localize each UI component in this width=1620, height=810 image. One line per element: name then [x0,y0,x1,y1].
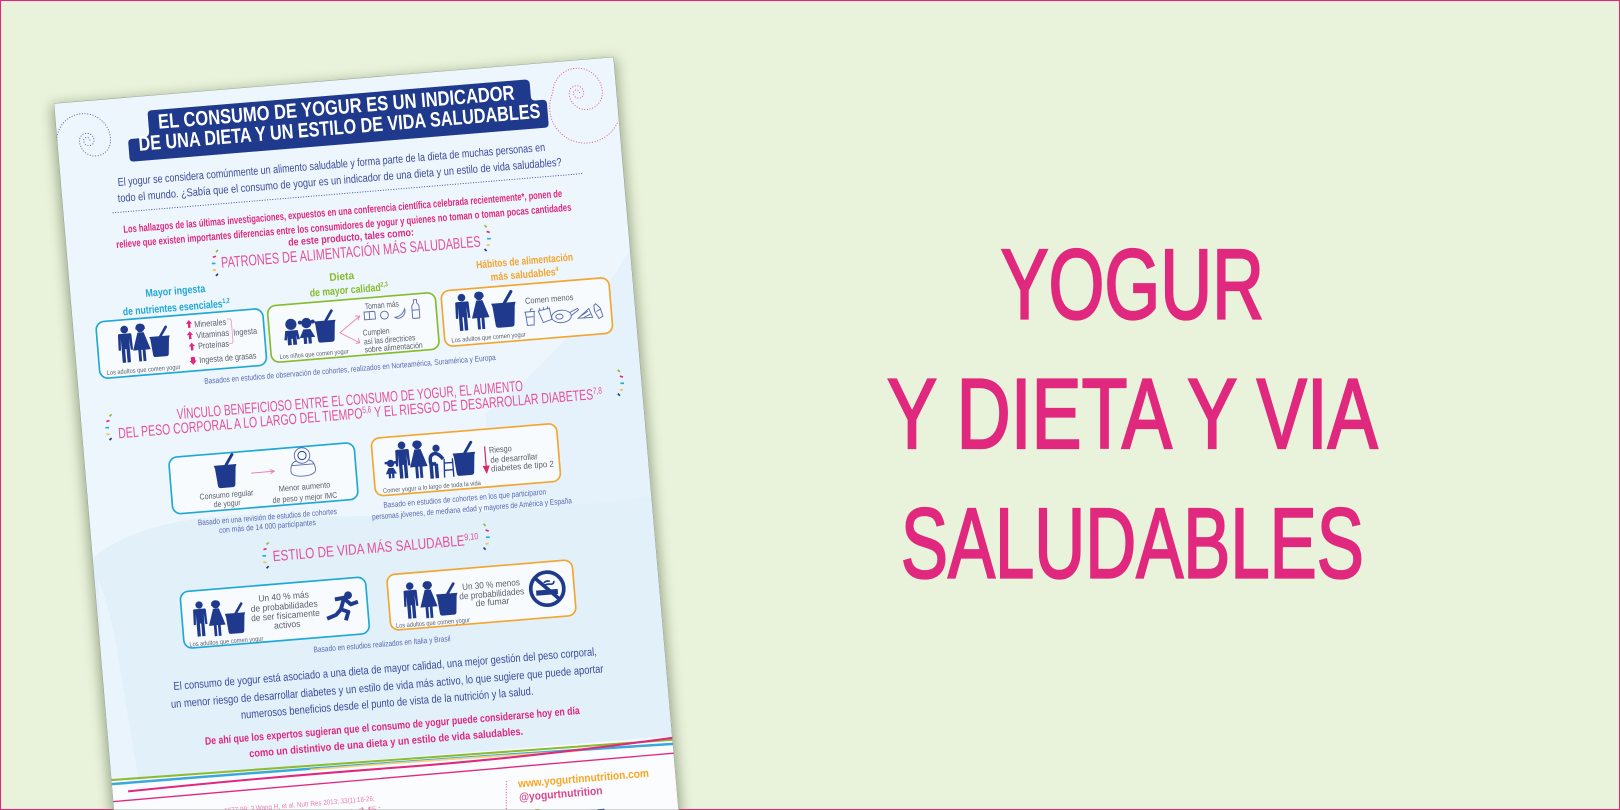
card: activos: Un 40 % más [258,589,310,604]
card: diabetes: Riesgo [489,443,512,455]
subheading: nutrientes: 1,2 [222,297,230,305]
caption: participantes: personas jóvenes, de mediana edad y mayores de América y España [372,496,573,522]
card: fumar [386,560,576,631]
card: peso: Consumo regular [199,488,254,502]
conclusion text: numerosos beneficios desde el punto de vista de la nutrición y la salud. [240,686,534,722]
card: diabetes [371,423,561,496]
highlighted research paragraph: Los hallazgos de las últimas investigaciones, expuestos en una conferencia científica celebrada recientemente*, ponen de [123,188,563,236]
card: dieta: así las directrices [363,333,416,346]
subheading: nutrientes: Mayor ingesta [145,283,207,300]
section heading: vinculo: Y EL RIESGO DE DESARROLLAR DIABETES [371,386,594,421]
spiral: left [57,114,111,156]
section heading: vinculo: VÍNCULO BENEFICIOSO ENTRE EL CONSUMO DE YOGUR, EL AUMENTO [176,378,524,423]
card: peso: de peso y mejor IMC [272,491,338,505]
card: nutrientes: Los adultos que comen yogur [107,364,181,377]
subheading: calidad: de mayor calidad [309,280,398,300]
conclusion highlight: como un distintivo de una dieta y un estilo de vida saludables. [249,726,524,760]
card: dieta: Toman más [365,299,399,311]
conclusion highlight: De ahí que los expertos sugieran que el consumo de yogur puede considerarse hoy en día [204,705,581,748]
section heading: estilo: ESTILO DE VIDA MÁS SALUDABLE [272,528,518,565]
title banner [126,78,549,162]
subheading: nutrientes: de nutrientes esenciales [122,296,249,318]
caption: revision: Basado en una revisión de estudios de cohortes [198,507,337,527]
conclusion text [170,646,604,722]
caption: italia: Basado en estudios realizados en Italia y Brasil [313,634,451,654]
poster [54,57,682,810]
card: habitos: Los adultos que comen yogur [451,331,527,345]
section heading: vinculo [105,370,624,442]
headline: YOGUR [1001,230,1264,341]
highlighted research paragraph: relieve que existen importantes diferencias entre los consumidores de yogur y quienes no toman o toman pocas cantidades [116,202,572,251]
section heading: estilo: 9,10 [464,531,479,542]
card: fumar: de fumar [475,596,510,608]
card: dieta: Cumplen [362,326,390,338]
card: activos: activos [274,619,301,631]
subheading: calidad: 2,3 [380,281,388,289]
card: peso [168,442,358,514]
highlighted research paragraph: de este producto, tales como: [288,227,414,249]
poster shadow [52,59,682,810]
card: diabetes: de desarrollar [490,451,538,465]
subheading: calidad [310,272,388,297]
caption: cohortes: Basados en estudios de observación de cohortes, realizados en Norteamérica, Suramérica y Europa [204,353,497,386]
card: nutrientes: Vitaminas [196,328,230,340]
headline: SALUDABLES [901,489,1364,600]
title banner: DE UNA DIETA Y UN ESTILO DE VIDA SALUDABLES [138,100,541,156]
headline [887,230,1378,600]
section heading: patrones: PATRONES DE ALIMENTACIÓN MÁS SALUDABLES [220,234,481,272]
card: dieta: sobre alimentación [364,341,423,354]
card: nutrientes: Ingesta de grasas [199,350,257,365]
spiral: right [550,68,618,143]
card: peso: de yogur [213,498,241,509]
card: nutrientes: Proteínas [198,338,230,351]
subheading: habitos: Hábitos de alimentación [476,252,573,271]
card: activos: de ser físicamente [251,608,320,623]
subheading: nutrientes [123,285,230,316]
card: fumar: Los adultos que comen yogur [396,617,471,630]
card: dieta [267,292,440,363]
subheading: habitos: más saludables [490,265,571,284]
subheading: calidad: Dieta [329,270,355,284]
card: dieta: Los niños que comen yogur [279,348,350,361]
card: nutrientes [96,308,267,379]
card: activos: de probabilidades [250,599,318,614]
section heading: vinculo: 5,6 [362,404,372,415]
card: nutrientes: Minerales [194,317,227,329]
caption: revision [198,509,337,533]
subheading: habitos: 4 [555,266,559,273]
website and handle: @yogurtnutrition [519,785,603,804]
conclusion text: un menor riesgo de desarrollar diabetes y un estilo de vida más activo, lo que sugiere que puede aportar [170,663,604,711]
card: activos [180,577,370,649]
section heading: vinculo: DEL PESO CORPORAL A LO LARGO DEL TIEMPO [118,397,467,442]
website and handle: www.yogurtinnutrition.com [517,768,649,791]
card: habitos: Comen menos [525,292,574,306]
coloured wave lines [112,738,674,802]
headline: Y DIETA Y VIA [887,359,1378,470]
intro text: todo el mundo. ¿Sabía que el consumo de yogur es un indicador de una dieta y un estilo de vida saludables? [117,157,562,205]
conclusion text: El consumo de yogur está asociado a una dieta de mayor calidad, una mejor gestión del peso corporal, [173,646,597,693]
card: diabetes: Comer yogur a lo largo de toda la vida [383,480,481,495]
card: fumar: de probabilidades [459,586,525,601]
card: diabetes: diabetes de tipo 2 [491,459,554,474]
title banner: EL CONSUMO DE YOGUR ES UN INDICADOR [157,82,515,134]
website and handle [517,768,649,810]
card: habitos [441,277,613,347]
section heading: vinculo: 7,8 [592,385,602,396]
caption: participantes: Basado en estudios de cohortes en los que participaron [383,487,546,510]
intro text: El yogur se considera comúnmente un alimento saludable y forma parte de la dieta de muchas personas en [117,142,546,189]
section heading: patrones [212,225,491,276]
card: nutrientes: Ingesta [233,326,257,338]
card: activos: Los adultos que comen yogur [189,636,264,649]
caption: revision: con más de 14 000 participantes [219,518,316,535]
subheading: habitos [476,253,573,281]
card: peso: Menor aumento [278,480,331,494]
conclusion highlight [204,705,581,760]
card: fumar: Un 30 % menos [462,577,521,592]
